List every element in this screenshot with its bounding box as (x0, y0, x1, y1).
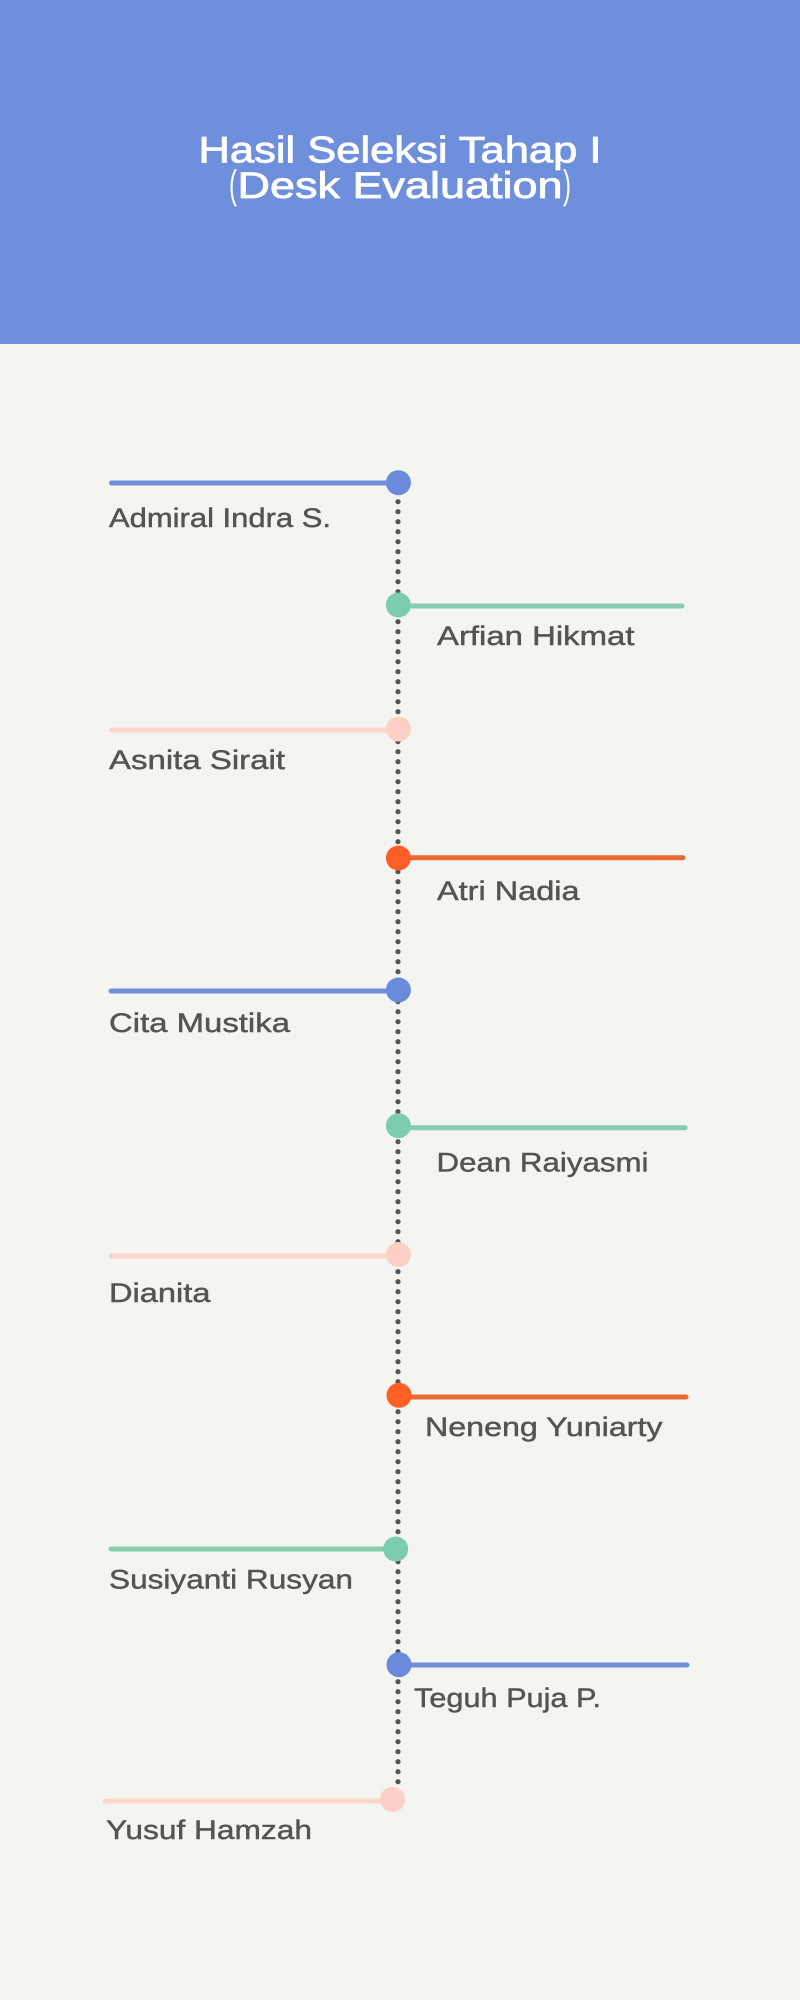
timeline entry: Cita Mustika (109, 978, 411, 1038)
timeline entry: Dianita: Dianita (109, 1278, 212, 1308)
timeline entry: Neneng Yuniarty (386, 1383, 686, 1442)
timeline entry: Yusuf Hamzah (105, 1787, 405, 1845)
title: Desk Evaluation (238, 165, 562, 206)
header banner (0, 0, 800, 344)
timeline entry: Dean Raiyasmi (386, 1113, 685, 1178)
timeline entry: Atri Nadia (386, 846, 683, 906)
title: Hasil Seleksi Tahap I (198, 130, 602, 170)
title (198, 130, 602, 207)
timeline entry: Asnita Sirait: Asnita Sirait (109, 745, 286, 775)
timeline entry: Teguh Puja P.: Teguh Puja P. (414, 1683, 601, 1713)
dotted timeline spine (395, 502, 401, 1782)
timeline entry: Arfian Hikmat (386, 592, 682, 651)
timeline entry: Dianita (109, 1242, 411, 1308)
timeline entry: Atri Nadia: Atri Nadia (437, 876, 581, 906)
timeline entry: Admiral Indra S.: Admiral Indra S. (109, 503, 331, 533)
timeline entry: Teguh Puja P. (386, 1652, 687, 1713)
timeline entry: Asnita Sirait (109, 716, 411, 775)
timeline entry: Dean Raiyasmi: Dean Raiyasmi (436, 1148, 648, 1178)
timeline entry: Arfian Hikmat: Arfian Hikmat (437, 621, 635, 651)
timeline entry: Susiyanti Rusyan (109, 1536, 408, 1594)
timeline entry: Admiral Indra S. (109, 470, 411, 533)
title: ) (563, 163, 571, 207)
timeline entry: Neneng Yuniarty: Neneng Yuniarty (425, 1412, 663, 1442)
timeline entry: Yusuf Hamzah: Yusuf Hamzah (106, 1815, 312, 1845)
timeline entry: Susiyanti Rusyan: Susiyanti Rusyan (109, 1564, 353, 1594)
title: ( (229, 163, 237, 207)
timeline entry: Cita Mustika: Cita Mustika (109, 1008, 291, 1038)
